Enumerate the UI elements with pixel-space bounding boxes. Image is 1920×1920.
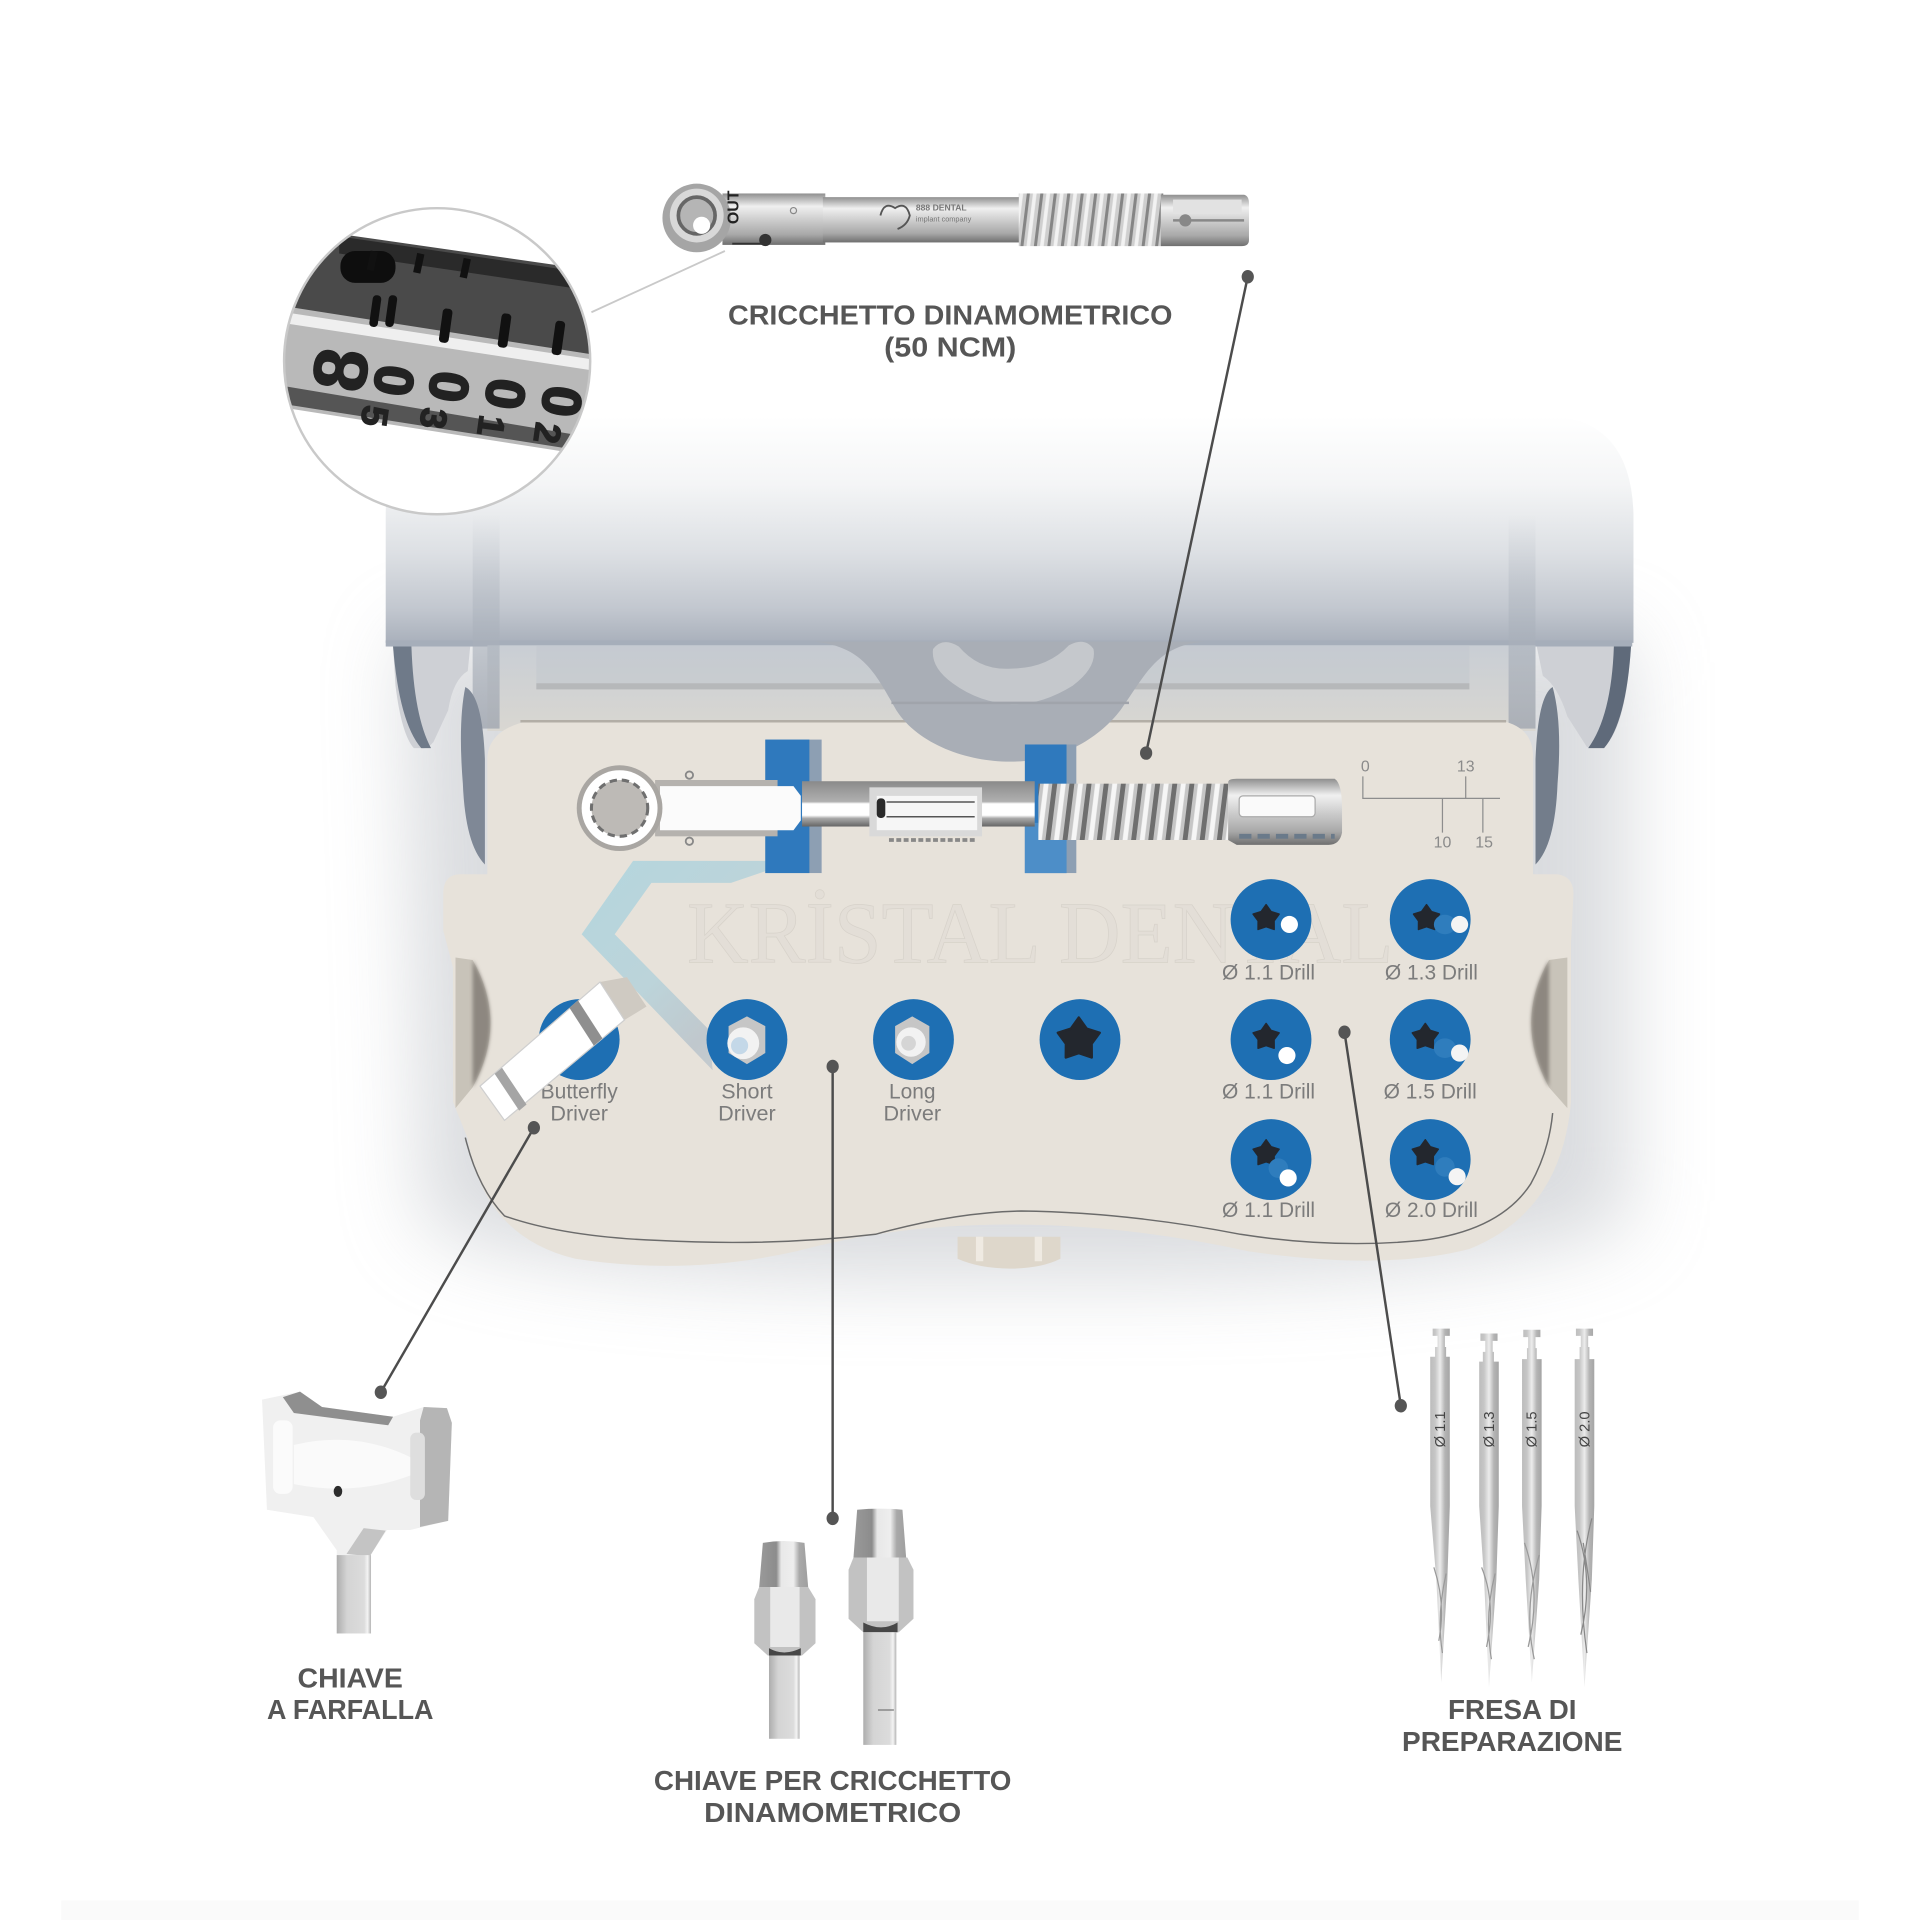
blue clips — [765, 740, 1076, 873]
long ratchet wrench — [849, 1509, 913, 1745]
label: ratchet wrench: DINAMOMETRICO — [704, 1797, 961, 1828]
torque ratchet top — [662, 184, 1249, 252]
drill socket 1.1 top — [1222, 879, 1315, 985]
torque ratchet top: OUT — [725, 190, 742, 224]
drill socket 1.3: Ø 1.3 Drill — [1385, 962, 1478, 985]
drill 1.5 — [1522, 1330, 1542, 1682]
butterfly driver socket — [539, 999, 620, 1125]
torque ratchet top: implant company — [916, 215, 972, 224]
leader line: ratchet — [1140, 270, 1254, 760]
long driver socket: Driver — [883, 1102, 941, 1125]
watermark: company name: KRİSTAL DENTAL — [687, 884, 1393, 982]
torque ratchet top: 888 DENTAL — [916, 203, 967, 213]
drill 1.5: Ø 1.5 — [1525, 1411, 1541, 1447]
engraved scale numerals — [313, 350, 582, 443]
label: butterfly key: CHIAVE — [298, 1662, 403, 1693]
engraved scale numerals: 0 — [418, 368, 481, 406]
long driver socket — [873, 999, 954, 1125]
butterfly key — [262, 1392, 452, 1633]
preparation drills — [1430, 1329, 1594, 1687]
engraved scale numerals: 0 — [474, 375, 538, 413]
watermark: chevron logo — [582, 861, 796, 1070]
label: torque ratchet: CRICCHETTO DINAMOMETRICO — [728, 299, 1172, 330]
drill socket 1.1 bottom — [1222, 1119, 1315, 1222]
engraved scale numerals: 5 — [353, 403, 396, 429]
drill 2.0 — [1575, 1329, 1594, 1687]
drill socket 1.1 middle — [1222, 999, 1315, 1103]
long driver socket: Long — [889, 1080, 936, 1103]
engraved scale numerals: 0 — [530, 382, 594, 420]
drill 1.1 — [1430, 1329, 1450, 1682]
engraved scale numerals: 0 — [363, 362, 426, 400]
drill 2.0: Ø 2.0 — [1577, 1411, 1593, 1447]
engraved scale numerals: 2 — [526, 420, 569, 446]
drill socket 1.5 — [1384, 999, 1477, 1103]
label: preparation drill: FRESA DI — [1448, 1694, 1577, 1725]
lid tab with finger grip — [814, 642, 1206, 762]
drill 1.3 — [1479, 1333, 1499, 1687]
depth scale diagram: 13 — [1457, 758, 1475, 775]
drill socket 1.3 — [1385, 879, 1478, 985]
engraved scale numerals: 1 — [469, 413, 513, 439]
empty socket — [1040, 999, 1120, 1080]
leader line: drills — [1338, 1026, 1407, 1412]
short driver socket: Driver — [718, 1102, 776, 1125]
drill socket 1.1 top: Ø 1.1 Drill — [1222, 962, 1315, 985]
drill socket 1.1 bottom: Ø 1.1 Drill — [1222, 1199, 1315, 1222]
engraved scale numerals: 3 — [412, 405, 455, 431]
butterfly driver socket: Butterfly — [541, 1080, 618, 1103]
short driver socket: Short — [721, 1080, 773, 1103]
label: torque ratchet: (50 NCM) — [884, 331, 1016, 362]
magnified ratchet lens — [282, 207, 592, 516]
tray shadow — [404, 637, 1629, 1280]
drill socket 1.5: Ø 1.5 Drill — [1384, 1080, 1477, 1103]
right hinge claw — [1536, 647, 1631, 864]
short driver socket — [707, 999, 787, 1125]
drill 1.1: Ø 1.1 — [1433, 1411, 1449, 1447]
leader line: butterfly key — [375, 1121, 540, 1399]
leader line: ratchet wrench — [827, 1060, 839, 1525]
beige tray — [443, 720, 1573, 1269]
drill 1.3: Ø 1.3 — [1482, 1411, 1498, 1447]
depth scale diagram: 10 — [1434, 834, 1451, 851]
depth scale diagram: 15 — [1475, 834, 1493, 851]
depth scale diagram: 0 — [1361, 758, 1370, 775]
drill socket 2.0 — [1385, 1119, 1478, 1222]
ratchet in tray — [577, 740, 1342, 873]
engraved scale numerals: 8 — [296, 343, 386, 397]
butterfly key in tray — [480, 977, 647, 1120]
left hinge claw — [393, 647, 485, 864]
depth scale diagram — [1361, 758, 1500, 851]
label: ratchet wrench: CHIAVE PER CRICCHETTO — [654, 1765, 1011, 1796]
drill socket 1.1 middle: Ø 1.1 Drill — [1222, 1080, 1315, 1103]
butterfly driver socket: Driver — [550, 1102, 608, 1125]
transparent case lid — [386, 416, 1633, 731]
zoom connector line — [591, 251, 725, 312]
label: butterfly key: A FARFALLA — [267, 1694, 433, 1725]
label: preparation drill: PREPARAZIONE — [1402, 1726, 1622, 1757]
drill socket 2.0: Ø 2.0 Drill — [1385, 1199, 1478, 1222]
short ratchet wrench — [754, 1541, 816, 1739]
